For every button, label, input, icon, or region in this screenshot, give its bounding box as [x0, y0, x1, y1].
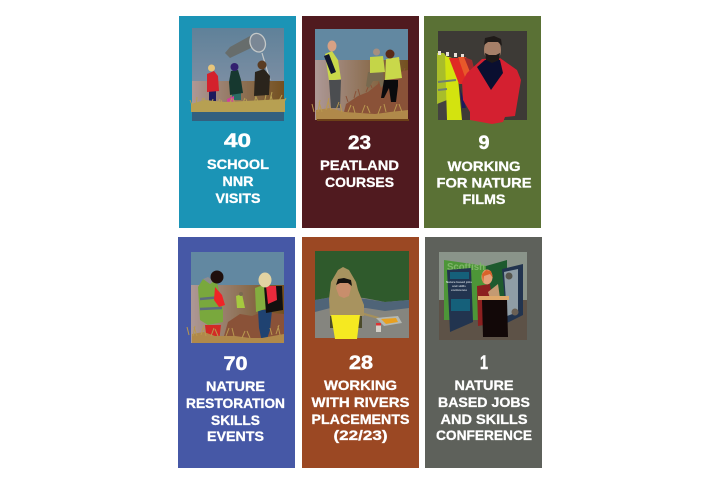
panel: nature based jobs and skills conference — [425, 237, 542, 468]
label: working with rivers placements (22/23): WORKING — [324, 377, 397, 393]
label: working with rivers placements (22/23): (22/23) — [334, 427, 388, 443]
label: nature restoration skills events: RESTORATION — [186, 395, 285, 411]
number: 23: 23 — [348, 133, 371, 154]
illustration: speaker at lectern with banners: and skills — [452, 284, 466, 288]
number: 28: 28 — [349, 353, 373, 374]
label: school NNR visits: VISITS — [216, 190, 260, 206]
label: nature restoration skills events: SKILLS — [211, 412, 260, 428]
label: nature based jobs and skills conference: AND SKILLS — [440, 411, 528, 427]
label: nature restoration skills events — [186, 378, 285, 444]
illustration: school children with net — [190, 28, 286, 121]
label: school NNR visits: NNR — [222, 173, 254, 189]
number: 70: 70 — [224, 354, 248, 375]
label: working for nature films: WORKING — [448, 158, 521, 174]
number: 9: 9 — [478, 133, 490, 154]
panel: school NNR visits — [179, 16, 296, 228]
panel: working with rivers placements — [302, 237, 419, 468]
illustration: speaker at lectern with banners — [439, 252, 527, 340]
illustration: person in hood with yellow bucket — [315, 251, 409, 339]
label: peatland courses: COURSES — [325, 174, 394, 190]
illustration: speaker at lectern with banners: Scottish — [447, 262, 485, 273]
number: 1: 1 — [480, 353, 488, 374]
label: nature restoration skills events: NATURE — [206, 378, 265, 394]
panel: nature restoration skills events — [178, 237, 295, 468]
label: nature based jobs and skills conference — [436, 377, 532, 443]
label: working with rivers placements (22/23): PLACEMENTS — [312, 411, 410, 427]
label: nature restoration skills events: EVENTS — [207, 428, 264, 444]
label: peatland courses — [320, 157, 399, 190]
number: 40: 40 — [224, 131, 251, 152]
illustration: volunteers walking in grassland — [187, 252, 284, 343]
panel: peatland courses — [302, 16, 419, 228]
illustration: man in red jacket with hi-vis coats — [437, 31, 527, 124]
illustration: people in vests in a peatland — [312, 29, 409, 121]
label: nature based jobs and skills conference: NATURE — [454, 377, 514, 393]
label: nature based jobs and skills conference: CONFERENCE — [436, 427, 532, 443]
label: nature based jobs and skills conference: BASED JOBS — [438, 394, 530, 410]
label: school NNR visits — [207, 156, 269, 206]
label: working for nature films: FILMS — [462, 191, 506, 207]
label: peatland courses: PEATLAND — [320, 157, 399, 173]
illustration: speaker at lectern with banners: Nature based jobs — [446, 280, 472, 284]
label: school NNR visits: SCHOOL — [207, 156, 269, 172]
label: working with rivers placements (22/23) — [312, 377, 410, 443]
label: working for nature films: FOR NATURE — [436, 174, 532, 190]
label: working with rivers placements (22/23): WITH RIVERS — [312, 394, 410, 410]
label: working for nature films — [436, 158, 532, 207]
panel: working for nature films — [424, 16, 541, 228]
illustration: speaker at lectern with banners: conference — [451, 288, 467, 292]
